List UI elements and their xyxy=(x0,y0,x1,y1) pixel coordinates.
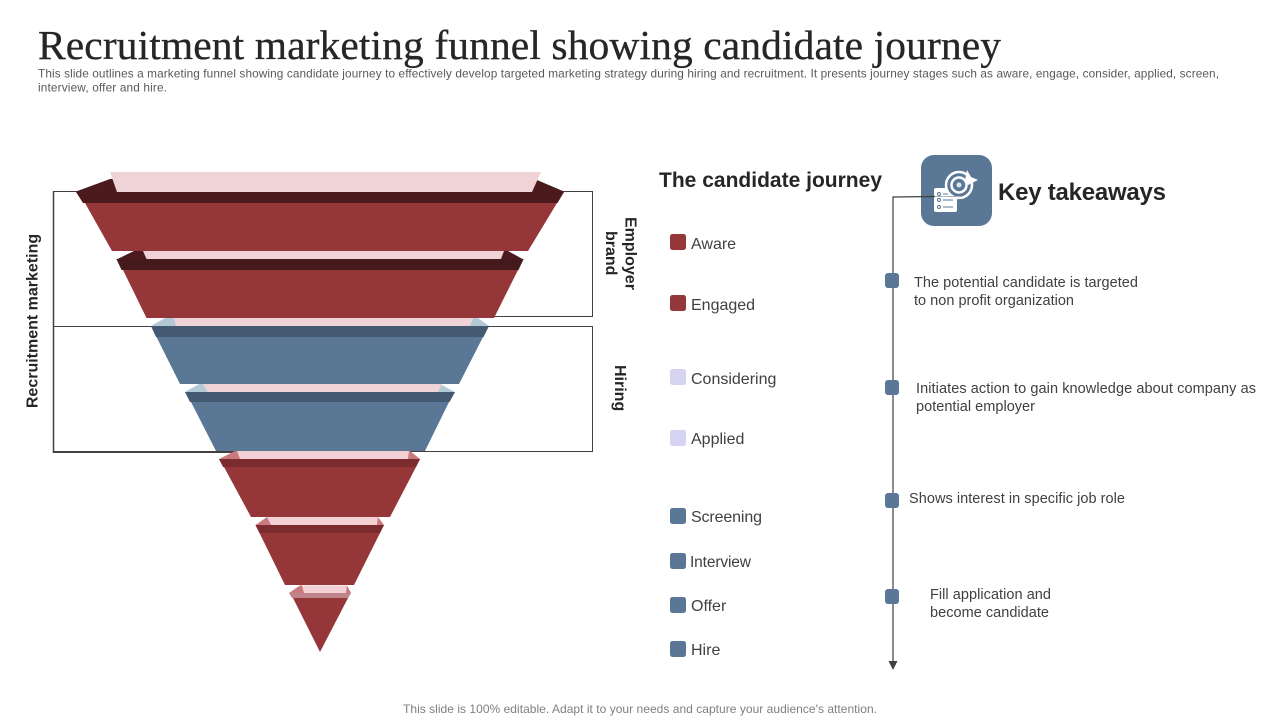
title: Recruitment marketing funnel showing candidate journey xyxy=(38,22,1001,68)
funnel layer 6: interview xyxy=(256,517,384,585)
funnel layer 7: offer and hire xyxy=(289,586,351,652)
legend item: aware: Aware xyxy=(691,236,736,253)
takeaway 4 xyxy=(885,587,1051,621)
legend item: engaged: Engaged xyxy=(691,297,755,314)
funnel layer 1: aware xyxy=(76,172,564,251)
icon: target and checklist xyxy=(921,155,992,226)
frame: employer brand and hiring brackets xyxy=(53,191,592,453)
takeaway 1: The potential candidate is targeted xyxy=(914,275,1138,291)
legend item: hire xyxy=(670,641,720,659)
funnel layer 3: considering xyxy=(151,318,489,384)
side label: employer brand: Employer xyxy=(622,217,638,290)
legend item: applied xyxy=(670,430,744,448)
timeline arrow xyxy=(888,196,935,670)
legend item: offer xyxy=(670,597,727,615)
takeaway 2 xyxy=(885,380,1256,415)
funnel layer 5: screening xyxy=(219,451,420,517)
side label: hiring: Hiring xyxy=(611,365,628,411)
description text xyxy=(38,66,1219,94)
legend item: considering: Considering xyxy=(691,371,776,388)
takeaway 1 xyxy=(885,273,1138,309)
footer note: This slide is 100% editable. Adapt it to your needs and capture your audience's attention. xyxy=(403,702,877,716)
takeaway 4: become candidate xyxy=(930,605,1049,621)
legend item: engaged xyxy=(670,295,755,314)
funnel layer 4: applied xyxy=(185,384,455,451)
heading: the candidate journey: The candidate journey xyxy=(659,169,882,192)
legend item: interview: Interview xyxy=(690,554,752,571)
takeaway 2: potential employer xyxy=(916,399,1035,415)
side label: employer brand: brand xyxy=(602,231,619,275)
takeaway 1: to non profit organization xyxy=(914,293,1074,309)
legend item: offer: Offer xyxy=(691,598,727,615)
description text: interview, offer and hire. xyxy=(38,80,167,94)
legend item: screening: Screening xyxy=(691,509,762,526)
takeaway 4: Fill application and xyxy=(930,587,1051,603)
funnel layer 2: engaged xyxy=(116,251,524,318)
description text: This slide outlines a marketing funnel showing candidate journey to effectively develop targeted marketing strategy during hiring and recruitment. It presents journey stages such as aware, engage, consider, applied, screen, xyxy=(38,66,1219,80)
side label: recruitment marketing: Recruitment marketing xyxy=(24,234,42,408)
legend item: applied: Applied xyxy=(691,431,744,448)
legend xyxy=(670,234,776,659)
takeaway 3: Shows interest in specific job role xyxy=(909,491,1125,507)
side label: employer brand xyxy=(602,217,638,290)
legend item: aware xyxy=(670,234,736,253)
takeaway 2: Initiates action to gain knowledge about company as xyxy=(916,381,1256,397)
legend item: hire: Hire xyxy=(691,642,720,659)
takeaways xyxy=(885,273,1256,621)
funnel xyxy=(76,172,564,652)
heading: key takeaways: Key takeaways xyxy=(998,179,1166,206)
